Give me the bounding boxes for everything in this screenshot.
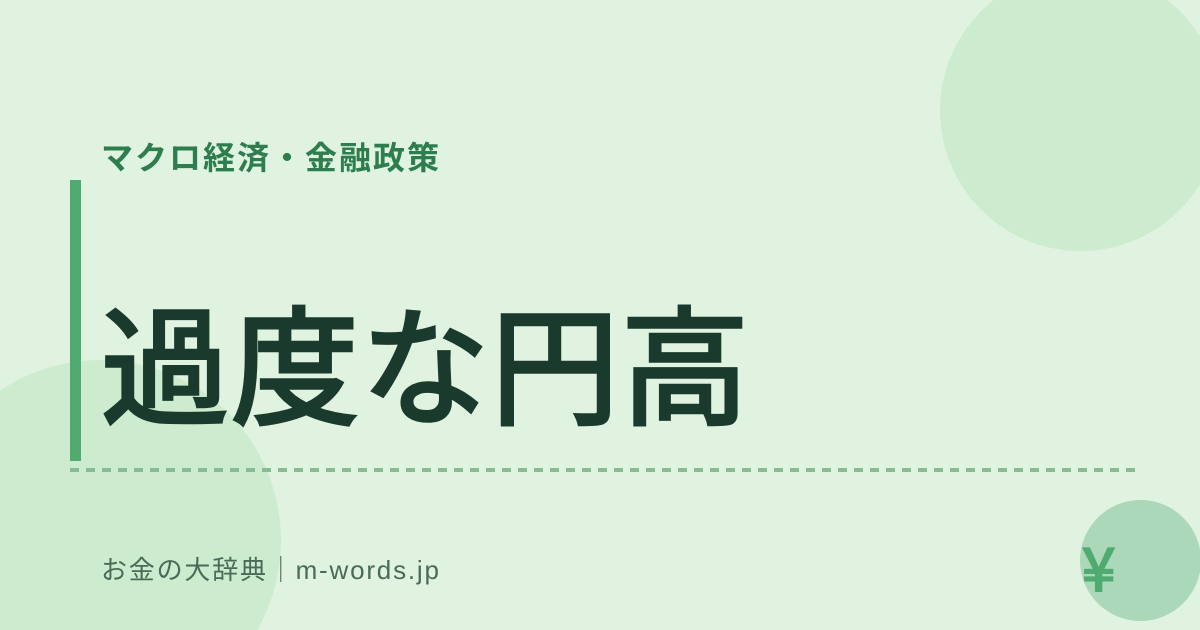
icon: yen sign: ¥ [1082,522,1115,609]
dashed divider [70,468,1135,472]
decorative circle: bottom left [0,360,281,630]
category label: マクロ経済・金融政策 [101,140,441,176]
site name: お金の大辞典｜m-words.jp [101,555,441,585]
decorative circle: bottom right [1080,500,1200,621]
accent bar [70,180,81,461]
decorative circle: top right [940,0,1200,251]
title: 過度な円高 [101,299,751,442]
